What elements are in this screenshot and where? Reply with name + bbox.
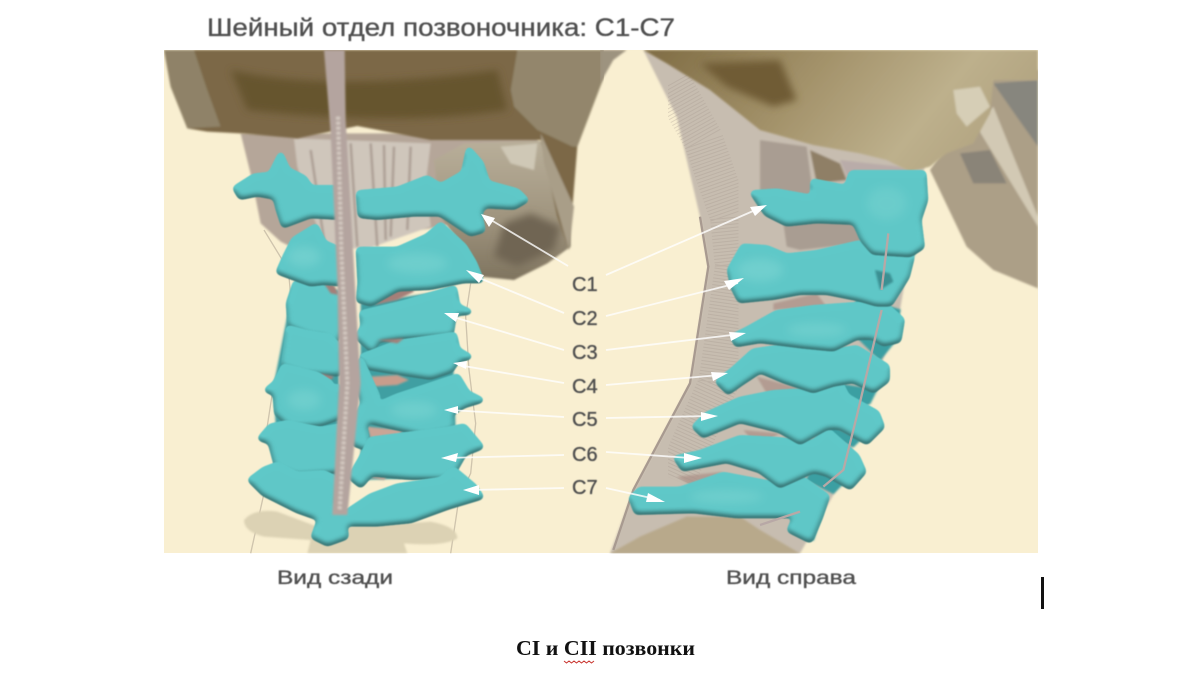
- side view highlights: [690, 187, 907, 503]
- C7 vertebra side: [632, 475, 827, 540]
- jaw and throat structures: [930, 70, 1038, 288]
- skull and mandible: [643, 50, 1038, 172]
- title: Шейный отдел позвоночника: C1-C7: [207, 14, 675, 42]
- ligament fibres: [672, 83, 735, 480]
- C1 vertebra side: [753, 173, 925, 254]
- foramen: [875, 270, 893, 290]
- lower ligament threads: [251, 230, 476, 553]
- side posterior ligament: [760, 233, 888, 525]
- left jaw corner at top: [600, 50, 627, 83]
- spinal ligament: [324, 50, 361, 515]
- C6 vertebra: [261, 423, 481, 485]
- vertebra labels: C6: [572, 444, 598, 466]
- panel: right-side view: [600, 50, 1038, 553]
- caption: right view: Вид справа: [726, 568, 857, 589]
- neck muscles: [241, 133, 571, 280]
- C1 vertebra: [236, 155, 339, 225]
- arrows from labels to side view: [606, 208, 760, 500]
- vertebra highlights: [287, 247, 447, 418]
- caption: rear view: Вид сзади: [277, 568, 393, 589]
- skull shading: [700, 60, 797, 107]
- skull shading: [231, 70, 507, 118]
- arrowheads rear view: [441, 214, 495, 495]
- jaw shadow: [494, 213, 561, 267]
- C5 vertebra: [267, 360, 481, 448]
- C1 vertebra, right half: [359, 150, 526, 233]
- C4 vertebra: [284, 328, 469, 377]
- C7 vertebra: [251, 465, 481, 543]
- vertebra labels: C4: [572, 376, 598, 398]
- C5 vertebra side: [695, 383, 882, 442]
- vertebra labels: C5: [572, 409, 598, 431]
- dark vertebral sides: [806, 254, 916, 542]
- vertebra labels: [572, 274, 598, 499]
- thoracic bone: [610, 517, 800, 553]
- C3 vertebra side: [733, 305, 902, 348]
- panel: rear view: [164, 50, 604, 553]
- C4 vertebra side: [718, 347, 887, 392]
- vertebra labels: C7: [572, 477, 598, 499]
- C3 vertebra: [289, 283, 469, 350]
- neck ligament band: [610, 50, 933, 553]
- skull base: [164, 50, 604, 250]
- vertebra labels: C2: [572, 308, 598, 330]
- band edge: [613, 217, 708, 550]
- arrowheads side view: [646, 205, 767, 502]
- infographic canvas: [164, 16, 1044, 664]
- panel: illustration background: [164, 50, 1038, 553]
- C2 vertebra: [279, 225, 481, 303]
- C6 vertebra side: [677, 430, 863, 487]
- arrows from labels to rear view: [445, 217, 568, 490]
- thoracic bone: [244, 511, 457, 553]
- text cursor: [1041, 577, 1044, 609]
- vertebra labels: C1: [572, 274, 598, 296]
- vertebra labels: C3: [572, 342, 598, 364]
- C2 vertebra side: [730, 243, 912, 303]
- spell-check squiggle: [564, 661, 594, 663]
- dark backing between vertebrae: [274, 290, 457, 480]
- discs: [321, 283, 414, 480]
- bottom caption: CI и CII позвонки: [516, 636, 695, 660]
